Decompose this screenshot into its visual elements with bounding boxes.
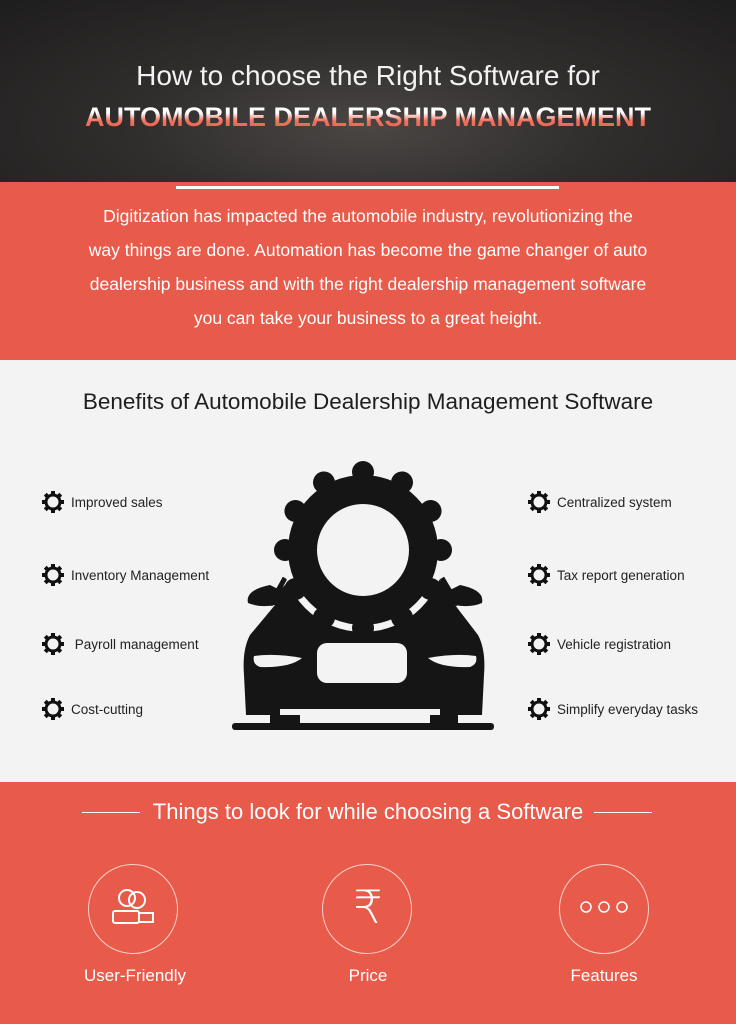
benefit: Centralized system [528, 491, 672, 513]
benefit: Cost-cutting: Cost-cutting [71, 702, 143, 716]
item: Price: ₹ [353, 880, 383, 934]
benefit: Cost-cutting [42, 698, 143, 720]
intro panel [0, 182, 736, 360]
benefit: Inventory Management [42, 564, 210, 586]
benefit: Tax report generation [528, 564, 685, 586]
title line 2: AUTOMOBILE DEALERSHIP MANAGEMENT [85, 102, 651, 132]
benefit: Vehicle registration: Vehicle registration [557, 636, 671, 652]
benefit: Centralized system: Centralized system [557, 494, 672, 510]
benefit: Vehicle registration [528, 633, 671, 655]
section heading: Things to look for while choosing a Software [153, 799, 583, 824]
item: Price [322, 864, 412, 985]
benefit: Tax report generation: Tax report generation [557, 568, 685, 582]
benefits heading: Benefits of Automobile Dealership Management Software [83, 389, 653, 414]
benefit: Improved sales [42, 491, 163, 513]
benefit: Improved sales: Improved sales [71, 494, 163, 510]
item: Features [559, 864, 649, 985]
intro text [88, 206, 647, 328]
icon: car with gear [232, 461, 494, 730]
benefit: Simplify everyday tasks: Simplify everyday tasks [557, 702, 698, 716]
benefit: Simplify everyday tasks [528, 698, 698, 720]
header photo banner [0, 0, 736, 182]
car body [232, 575, 494, 730]
item: User-Friendly [84, 864, 186, 985]
item: Price: Price [349, 966, 387, 985]
item: Features: Features [570, 966, 638, 985]
item: User-Friendly: User-Friendly [84, 966, 186, 985]
intro text: Digitization has impacted the automobile industry, revolutionizing the [103, 206, 633, 226]
bottom panel: things to look for [0, 782, 736, 1024]
intro text: dealership business and with the right dealership management software [90, 274, 646, 294]
benefit: Payroll management: Payroll management [75, 636, 199, 652]
intro text: way things are done. Automation has become the game changer of auto [89, 240, 647, 260]
benefit: Inventory Management: Inventory Management [71, 568, 209, 582]
intro text: you can take your business to a great height. [194, 308, 542, 328]
gear [241, 428, 485, 672]
title line 1: How to choose the Right Software for [136, 60, 600, 91]
benefit: Payroll management [42, 633, 199, 655]
